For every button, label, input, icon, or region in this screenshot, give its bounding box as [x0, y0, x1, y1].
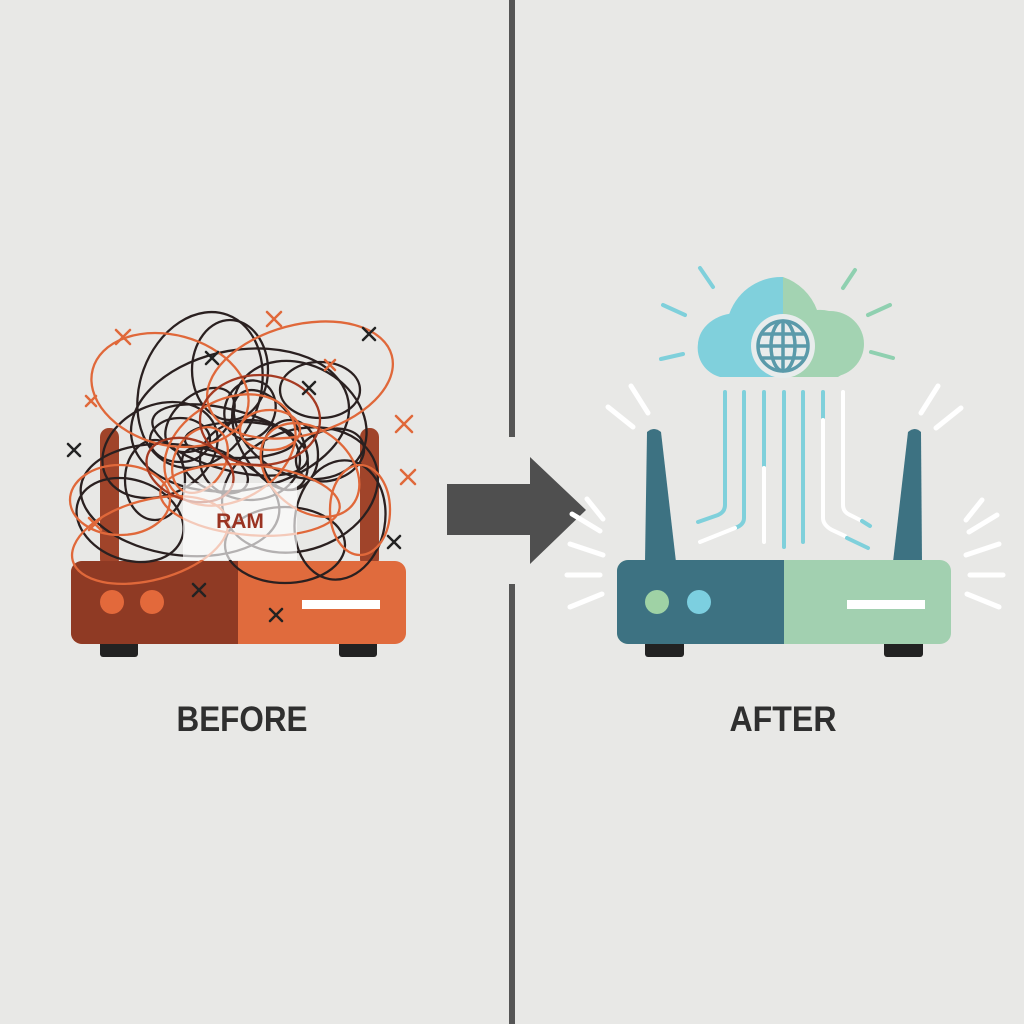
- router body: [617, 560, 951, 644]
- cloud rays: [661, 268, 893, 359]
- divider line: [509, 0, 515, 1024]
- signal rays: [567, 386, 1003, 607]
- feet: [645, 640, 923, 657]
- antennas: [645, 429, 922, 562]
- data lines: [698, 392, 870, 548]
- cloud: [698, 277, 864, 377]
- label: after: AFTER: [730, 700, 836, 739]
- before router: [62, 294, 415, 657]
- after: cloud with globe: [661, 268, 893, 548]
- antennas: [100, 428, 379, 568]
- arrow: [447, 457, 586, 564]
- router body: [71, 561, 406, 644]
- feet: [100, 640, 377, 657]
- label: before: BEFORE: [176, 700, 308, 739]
- error x marks: [68, 312, 415, 621]
- globe icon: [751, 314, 815, 378]
- tangled scribbles: [62, 294, 406, 599]
- RAM chip label: [183, 483, 297, 560]
- RAM chip label: RAM: [216, 510, 264, 533]
- after router: [567, 386, 1003, 657]
